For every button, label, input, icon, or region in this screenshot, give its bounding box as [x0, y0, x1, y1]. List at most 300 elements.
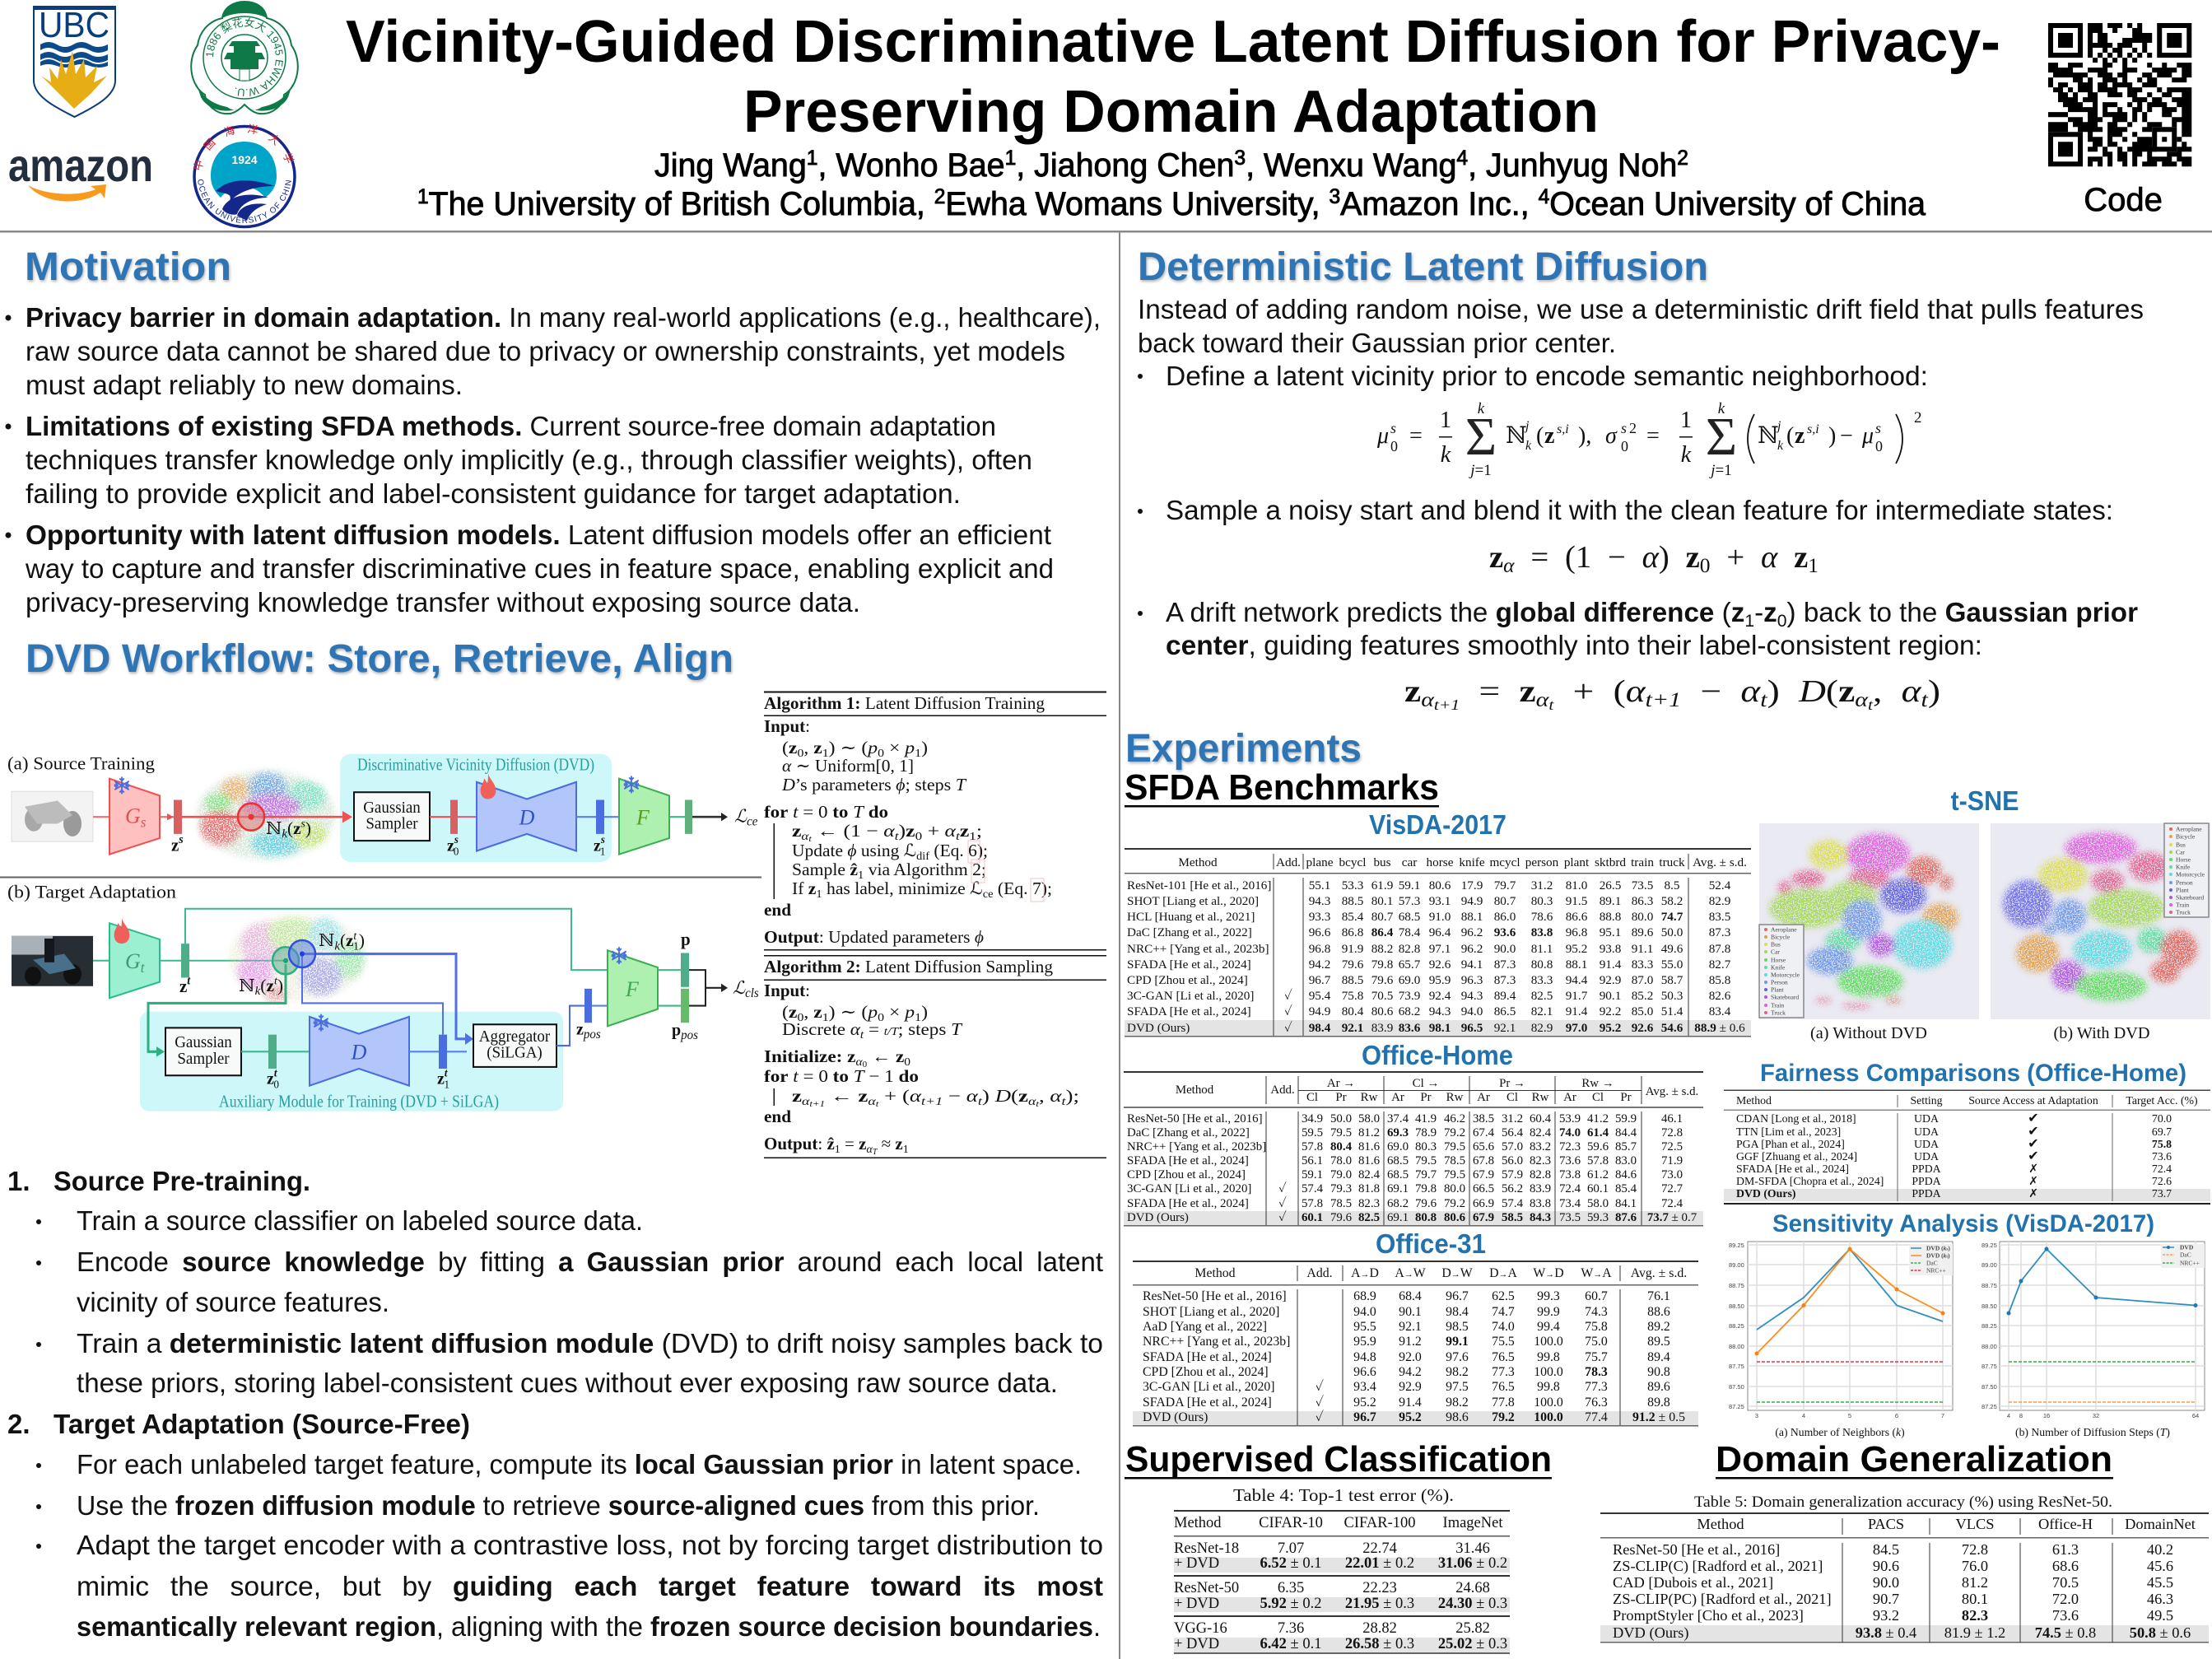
table header: Ar [1563, 1091, 1576, 1104]
values: 91.2 [1399, 1335, 1422, 1349]
values: 69.0 [1387, 1140, 1409, 1153]
legend: Motorcycle [1771, 972, 1800, 978]
values: 97.6 [1446, 1350, 1469, 1364]
values: 80.0 [1632, 910, 1654, 924]
rows: 90.7 [1873, 1591, 1899, 1607]
Algorithm 2: for t = 0 to T − 1 do [764, 1066, 919, 1086]
values: 82.4 [1530, 1126, 1552, 1139]
y axis labels: 87.50 [1981, 1383, 1997, 1391]
values: 82.5 [1358, 1211, 1380, 1224]
legend: Bicycle [2176, 833, 2196, 840]
Algorithm 2: Algorithm 2: Latent Diffusion Sampling [764, 957, 1053, 976]
values: 94.4 [1566, 973, 1588, 987]
Gaussian sampler: Sampler [177, 1051, 230, 1068]
formula: vicinity prior: k [1525, 439, 1532, 453]
legend: DVD (ks) [1926, 1245, 1950, 1251]
values: 59.1 [1399, 878, 1420, 892]
diffusion D: D [351, 1039, 366, 1065]
formula: drift update: , [1873, 674, 1902, 709]
bullet: drift network: z [1763, 597, 1777, 627]
values: 66.5 [1473, 1182, 1494, 1195]
affiliations: 1 [417, 185, 429, 208]
classifier F: F [636, 804, 650, 830]
table header: Rw [1446, 1091, 1464, 1104]
values: 82.7 [1709, 958, 1731, 972]
formula: vicinity prior: s [1875, 420, 1881, 436]
values: 91.5 [1566, 894, 1587, 908]
legend: Horse [1771, 957, 1786, 963]
values: 73.8 [1559, 1168, 1581, 1181]
rows: 21.95 ± 0.3 [1345, 1596, 1414, 1612]
Algorithm 2: α [855, 1056, 863, 1069]
x axis labels: 5 [1848, 1412, 1851, 1419]
values: 97.1 [1429, 942, 1451, 956]
values: 98.1 [1429, 1021, 1451, 1035]
Algorithm 1: Sample ẑ [792, 860, 858, 879]
rows: PGA [Phan et al., 2024] [1736, 1138, 1845, 1150]
teal skip line [185, 909, 608, 970]
y axis labels: 87.25 [1981, 1403, 1997, 1410]
values: 84.1 [1615, 1197, 1637, 1210]
panel a: source training: (a) Source Training [7, 753, 155, 773]
table: fairness [1724, 1090, 2210, 1205]
formula: vicinity prior: z [1544, 423, 1554, 449]
table header [1174, 1515, 1503, 1531]
values: 82.9 [1531, 1021, 1553, 1035]
values: 75.8 [1585, 1320, 1608, 1334]
bar z1s [594, 800, 605, 858]
Algorithm 2: ≈ [877, 1134, 895, 1153]
values: 100.0 [1534, 1396, 1563, 1410]
values: 59.9 [1615, 1112, 1637, 1125]
values: 96.2 [1461, 942, 1483, 956]
Algorithm 2: α [910, 1086, 922, 1106]
legend: Aeroplane [1771, 925, 1797, 934]
values: 78.6 [1531, 910, 1553, 924]
values: 91.4 [1399, 1396, 1422, 1410]
legend: DaC [1926, 1260, 1938, 1266]
values: 84.3 [1530, 1211, 1551, 1224]
route to D [241, 1051, 310, 1052]
values: 95.9 [1429, 973, 1451, 987]
rows: 69.7 [2152, 1125, 2172, 1138]
rows: ResNet-50 [He et al., 2016] [1613, 1541, 1780, 1558]
values: 31.2 [1502, 1112, 1523, 1125]
title: Preserving Domain Adaptation [743, 79, 1599, 145]
neighbour circles [272, 940, 315, 974]
bullet: opportunity: privacy-preserving knowledge transfer without exposing source data. [26, 587, 860, 617]
affiliations: The University of British Columbia, [429, 186, 934, 222]
legend: DVD [2180, 1243, 2194, 1251]
values: 98.2 [1446, 1365, 1469, 1379]
values: 82.1 [1531, 1004, 1553, 1018]
values: 100.0 [1534, 1365, 1563, 1379]
values: 57.3 [1399, 894, 1420, 908]
rows: ZS-CLIP(C) [Radford et al., 2021] [1613, 1558, 1823, 1575]
values: 80.7 [1371, 910, 1394, 924]
formula: vicinity prior: z [1795, 423, 1805, 449]
values: 95.4 [1309, 989, 1331, 1003]
table header: mcycl [1489, 855, 1520, 869]
values: 79.8 [1371, 958, 1394, 972]
QR code [2048, 26, 2191, 164]
method names: DVD (Ours) [1127, 1211, 1189, 1224]
predictions: cls [745, 986, 759, 1000]
line DVD kt [1755, 1247, 1944, 1355]
rows: 73.6 [2052, 1607, 2079, 1624]
values: 57.8 [1302, 1140, 1323, 1153]
bar z0t: t [274, 1066, 277, 1079]
values: 87.0 [1632, 973, 1654, 987]
bar z1t [437, 1035, 449, 1091]
rows: ✔ [2028, 1137, 2039, 1151]
table header: Add. [1306, 1266, 1333, 1280]
classifier output [669, 800, 758, 834]
values: 76.5 [1492, 1350, 1515, 1364]
values [1284, 878, 1745, 1035]
values: 72.8 [1661, 1126, 1683, 1139]
rows: 73.6 [2152, 1150, 2172, 1163]
method names: NRC++ [Yang et al., 2023b] [1127, 1140, 1266, 1153]
Algorithm 1: D’s parameters ϕ; steps T [781, 775, 966, 795]
table header: car [1402, 855, 1417, 869]
x axis labels: 32 [2093, 1412, 2099, 1419]
diffusion D [310, 1017, 409, 1086]
values: 98.2 [1446, 1396, 1469, 1410]
heading: supervised classification: Supervised Classification [1125, 1439, 1552, 1480]
values: 79.6 [1415, 1197, 1437, 1210]
values: 82.3 [1358, 1197, 1380, 1210]
rows: DVD (Ours) [1736, 1187, 1795, 1200]
sampler to D [430, 816, 450, 818]
bar zpos: z [576, 1020, 584, 1039]
authors: , Wenxu Wang [1246, 147, 1456, 184]
values: 50.3 [1661, 989, 1683, 1003]
values: 92.6 [1632, 1021, 1654, 1035]
values: 94.0 [1353, 1305, 1376, 1319]
x axis labels: 3 [1755, 1412, 1758, 1419]
formula: vicinity prior: ), [1578, 423, 1591, 449]
formula: vicinity prior: k [1441, 442, 1451, 468]
y axis labels: 89.25 [1981, 1242, 1997, 1249]
authors: 4 [1456, 147, 1468, 170]
values: 73.6 [1559, 1154, 1581, 1167]
heading: Deterministic Latent Diffusion [1138, 245, 1708, 289]
table header: ImageNet [1443, 1515, 1503, 1531]
table header: Rw [1361, 1091, 1378, 1104]
Algorithm 2: ← [867, 1046, 896, 1066]
bullet: privacy barrier [5, 302, 1101, 400]
values: 57.4 [1502, 1197, 1524, 1210]
method names: NRC++ [Yang et al., 2023b] [1127, 942, 1269, 956]
values: 94.0 [1461, 1004, 1483, 1018]
values: 88.8 [1600, 910, 1622, 924]
rows: 45.5 [2147, 1574, 2173, 1591]
formula: drift update: t+1 [1434, 697, 1460, 713]
Algorithm 2: − [943, 1086, 966, 1106]
values: 56.2 [1502, 1182, 1523, 1195]
values: 61.2 [1587, 1168, 1609, 1181]
table header: Ar → [1327, 1077, 1355, 1090]
rows: 90.6 [1873, 1558, 1899, 1574]
values [1278, 1112, 1697, 1224]
Algorithm 2: 1 [822, 1012, 829, 1024]
rows: 25.02 ± 0.3 [1438, 1636, 1507, 1652]
bar z1s: s [600, 833, 605, 846]
values: 78.0 [1330, 1154, 1352, 1167]
y axis labels: 89.00 [1981, 1261, 1997, 1269]
values: 69.0 [1399, 973, 1421, 987]
values: 54.6 [1661, 1021, 1683, 1035]
formula: vicinity prior [1376, 400, 1921, 479]
values: 17.9 [1461, 878, 1483, 892]
x axis labels: 8 [2019, 1412, 2023, 1419]
method names: SFADA [He et al., 2024] [1127, 1004, 1251, 1018]
classifier F [608, 950, 658, 1026]
Algorithm 1: has label, minimize ℒ [822, 878, 983, 898]
values: 95.2 [1353, 1396, 1376, 1410]
method names [1143, 1289, 1290, 1424]
bar zt: t [187, 975, 191, 988]
values: 57.8 [1302, 1197, 1323, 1210]
x axis labels: 4 [2007, 1412, 2010, 1419]
method names: AaD [Yang et al., 2022] [1143, 1320, 1267, 1334]
table: VisDA-2017 [1125, 848, 1751, 1037]
values: 60.1 [1587, 1182, 1609, 1195]
steps: source pre-training: Train a source classifier on labeled source data. [77, 1205, 643, 1236]
values: 89.8 [1647, 1396, 1670, 1410]
values: 88.2 [1371, 942, 1393, 956]
values: 94.2 [1399, 1365, 1422, 1379]
logo: UBC shield [34, 5, 115, 117]
values: 88.9 ± 0.6 [1694, 1021, 1745, 1035]
rows: 68.6 [2052, 1558, 2079, 1574]
formula: vicinity prior: μ [1861, 423, 1874, 449]
table header: Pr [1620, 1091, 1632, 1104]
Algorithm 1: t [895, 831, 900, 843]
values: 89.6 [1647, 1380, 1670, 1394]
rows: 6.52 ± 0.1 [1260, 1555, 1321, 1572]
vicinity circle: s [301, 817, 305, 830]
caption: (a) Number of Neighbors (k) [1775, 1426, 1905, 1439]
steps: target adaptation: Adapt the target encoder with a contrastive loss, not by forcing target distribution to [77, 1530, 1103, 1560]
values: 79.5 [1330, 1126, 1352, 1139]
rows: 73.7 [2152, 1187, 2172, 1200]
chart: t-SNE without DVD [1759, 823, 1979, 1042]
Algorithm 1: Algorithm 1: Latent Diffusion Training [764, 693, 1045, 713]
Algorithm 2: 0 [797, 1012, 803, 1024]
bullet: opportunity [5, 520, 1054, 617]
Algorithm 2: α [866, 1144, 873, 1156]
Algorithm 2: z [859, 1134, 866, 1153]
rows: 50.8 ± 0.6 [2130, 1624, 2191, 1641]
vicinity circle: ) [305, 820, 311, 838]
latent cluster b [229, 916, 366, 1001]
values: ✓ [1278, 1195, 1287, 1210]
steps: target adaptation: Use the frozen diffusion module to retrieve source-aligned cues from this prior. [77, 1490, 1040, 1521]
values: 99.3 [1537, 1289, 1560, 1303]
values: 79.7 [1415, 1168, 1437, 1181]
predictions: p [681, 930, 691, 949]
rows: 6.42 ± 0.1 [1260, 1636, 1321, 1652]
rows: ✔ [2028, 1125, 2039, 1139]
Algorithm 1: for t = 0 to T do [764, 802, 888, 822]
values: 68.5 [1387, 1168, 1409, 1181]
values: 71.9 [1661, 1154, 1683, 1167]
rows: DM-SFDA [Chopra et al., 2024] [1736, 1175, 1884, 1187]
Algorithm 2: Input: [764, 981, 810, 1000]
values: 59.6 [1587, 1140, 1609, 1153]
Algorithm 1: ← (1 − [812, 821, 883, 841]
values: 89.4 [1647, 1350, 1670, 1364]
formula: drift update: ) [1767, 674, 1799, 709]
table header: plane [1306, 855, 1334, 869]
rows: 7.07 [1278, 1540, 1304, 1557]
Gaussian sampler: Gaussian [363, 799, 421, 817]
rows: 72.8 [1962, 1541, 1988, 1558]
legend: Knife [1771, 963, 1786, 972]
values: 82.8 [1530, 1168, 1551, 1181]
values: 91.7 [1566, 989, 1588, 1003]
table header: Avg. ± s.d. [1693, 855, 1747, 869]
heading: domain generalization: Domain Generalization [1716, 1439, 2112, 1480]
values: 57.8 [1587, 1154, 1609, 1167]
table header: Ar [1391, 1091, 1404, 1104]
values: ✓ [1316, 1395, 1324, 1410]
rows: SFADA [He et al., 2024] [1736, 1163, 1849, 1175]
table header: A→W [1395, 1266, 1426, 1280]
feature bar zs [171, 800, 184, 855]
method names: SFADA [He et al., 2024] [1127, 1154, 1249, 1167]
rows: 25.82 [1455, 1620, 1490, 1637]
values: 79.8 [1415, 1182, 1437, 1195]
vicinity circle: z [293, 820, 301, 838]
bar z1t: 1 [444, 1079, 449, 1091]
values: 59.1 [1302, 1168, 1323, 1181]
affiliations: 2 [934, 185, 945, 208]
values: 99.1 [1446, 1335, 1469, 1349]
steps: target adaptation [7, 1409, 1103, 1642]
icon: flame [481, 774, 496, 799]
values: 88.5 [1342, 973, 1363, 987]
values: 41.9 [1415, 1112, 1437, 1125]
bullet: drift network: - [1754, 597, 1763, 627]
formula: vicinity prior: 1 [1680, 408, 1692, 433]
section divider [0, 877, 761, 878]
Gaussian sampler: Sampler [366, 815, 418, 833]
values: 89.6 [1632, 925, 1654, 939]
rows: PPDA [1912, 1163, 1941, 1175]
formula: drift update: α [1536, 689, 1549, 711]
values: 96.6 [1309, 925, 1331, 939]
values: 66.9 [1473, 1197, 1494, 1210]
formula: drift update: + ( [1553, 674, 1626, 709]
bullet: privacy barrier: raw source data cannot be shared due to privacy or ownership constraints, yet models [26, 336, 1065, 366]
method names: ResNet-50 [He et al., 2016] [1127, 1112, 1263, 1125]
y axis labels: 88.50 [1981, 1303, 1997, 1310]
icon: snowflake [612, 947, 626, 964]
bullet: drift network: center, guiding features smoothly into their label-consistent region: [1166, 630, 1982, 660]
y axis labels: 89.00 [1729, 1261, 1744, 1269]
values: 96.5 [1461, 1021, 1483, 1035]
rows: 28.82 [1362, 1620, 1397, 1637]
formula: vicinity prior: 0 [1621, 438, 1628, 454]
encoder Gs [109, 779, 160, 855]
intro text: Instead of adding random noise, we use a deterministic drift field that pulls features [1138, 294, 2144, 324]
vicinity circle: ℕ [266, 820, 281, 838]
x axis labels: 7 [1941, 1412, 1944, 1419]
values: 91.9 [1342, 942, 1363, 956]
formula: blend: 0 [1700, 555, 1711, 577]
rows [1613, 1541, 2191, 1642]
values: 79.6 [1371, 973, 1394, 987]
Algorithm 2: t [1062, 1096, 1067, 1108]
values: 73.5 [1632, 878, 1653, 892]
Algorithm 1: ) ∼ ( [829, 738, 868, 757]
method names: SFADA [He et al., 2024] [1127, 958, 1251, 972]
values: 95.5 [1353, 1320, 1376, 1334]
bullet: privacy barrier: Privacy barrier in domain adaptation. In many real-world applications (e.g., healthcare), [26, 302, 1101, 333]
affiliations: 4 [1539, 185, 1549, 208]
label Nk z1t: ( [340, 932, 346, 950]
legend: Plant [1771, 986, 1785, 993]
values: 79.0 [1330, 1168, 1352, 1181]
values: 98.4 [1446, 1305, 1469, 1319]
rows: 49.5 [2147, 1607, 2173, 1624]
values: 72.4 [1661, 1197, 1683, 1210]
Algorithm 1: ; [976, 821, 982, 841]
rows: 22.74 [1362, 1540, 1397, 1557]
rows: UDA [1914, 1138, 1939, 1150]
rows: 26.58 ± 0.3 [1345, 1636, 1414, 1652]
values: 81.2 [1358, 1126, 1380, 1139]
legend: Person [1771, 978, 1788, 986]
legend: Train [2176, 901, 2189, 909]
formula: blend: α [1503, 555, 1515, 577]
authors: , Junhyug Noh [1468, 147, 1677, 184]
table header: Cl [1306, 1091, 1318, 1104]
values: 91.0 [1429, 910, 1451, 924]
red arrow through cluster [182, 816, 342, 818]
formula: vicinity prior: = [1646, 423, 1660, 449]
Algorithm 1: end [764, 900, 791, 920]
rows: 84.5 [1873, 1541, 1899, 1558]
vicinity circle: k [282, 827, 288, 841]
rows: DVD (Ours) [1613, 1624, 1688, 1642]
values: 74.7 [1661, 910, 1683, 924]
values: 60.4 [1530, 1112, 1552, 1125]
Algorithm 2: t [978, 1096, 983, 1108]
values: 31.2 [1531, 878, 1553, 892]
values: 56.0 [1502, 1154, 1523, 1167]
rows: CDAN [Long et al., 2018] [1736, 1112, 1856, 1125]
table header: A→D [1351, 1266, 1379, 1280]
Gaussian sampler: Gaussian [175, 1034, 232, 1051]
Algorithm 2: 1 [915, 1012, 921, 1024]
values: 93.6 [1494, 925, 1516, 939]
y axis labels: 88.75 [1981, 1282, 1997, 1289]
table header: Method [1176, 1083, 1214, 1097]
values: 65.7 [1399, 958, 1421, 972]
values: 92.1 [1399, 1320, 1422, 1334]
formula: vicinity prior: 2 [1629, 420, 1637, 436]
legend: Bus [1771, 940, 1781, 948]
Algorithm 2: , [803, 1002, 813, 1022]
values: 73.7 ± 0.7 [1647, 1211, 1697, 1224]
predictions: ℒ [733, 978, 745, 998]
rows: 6.35 [1278, 1580, 1304, 1596]
values: 90.1 [1600, 989, 1621, 1003]
